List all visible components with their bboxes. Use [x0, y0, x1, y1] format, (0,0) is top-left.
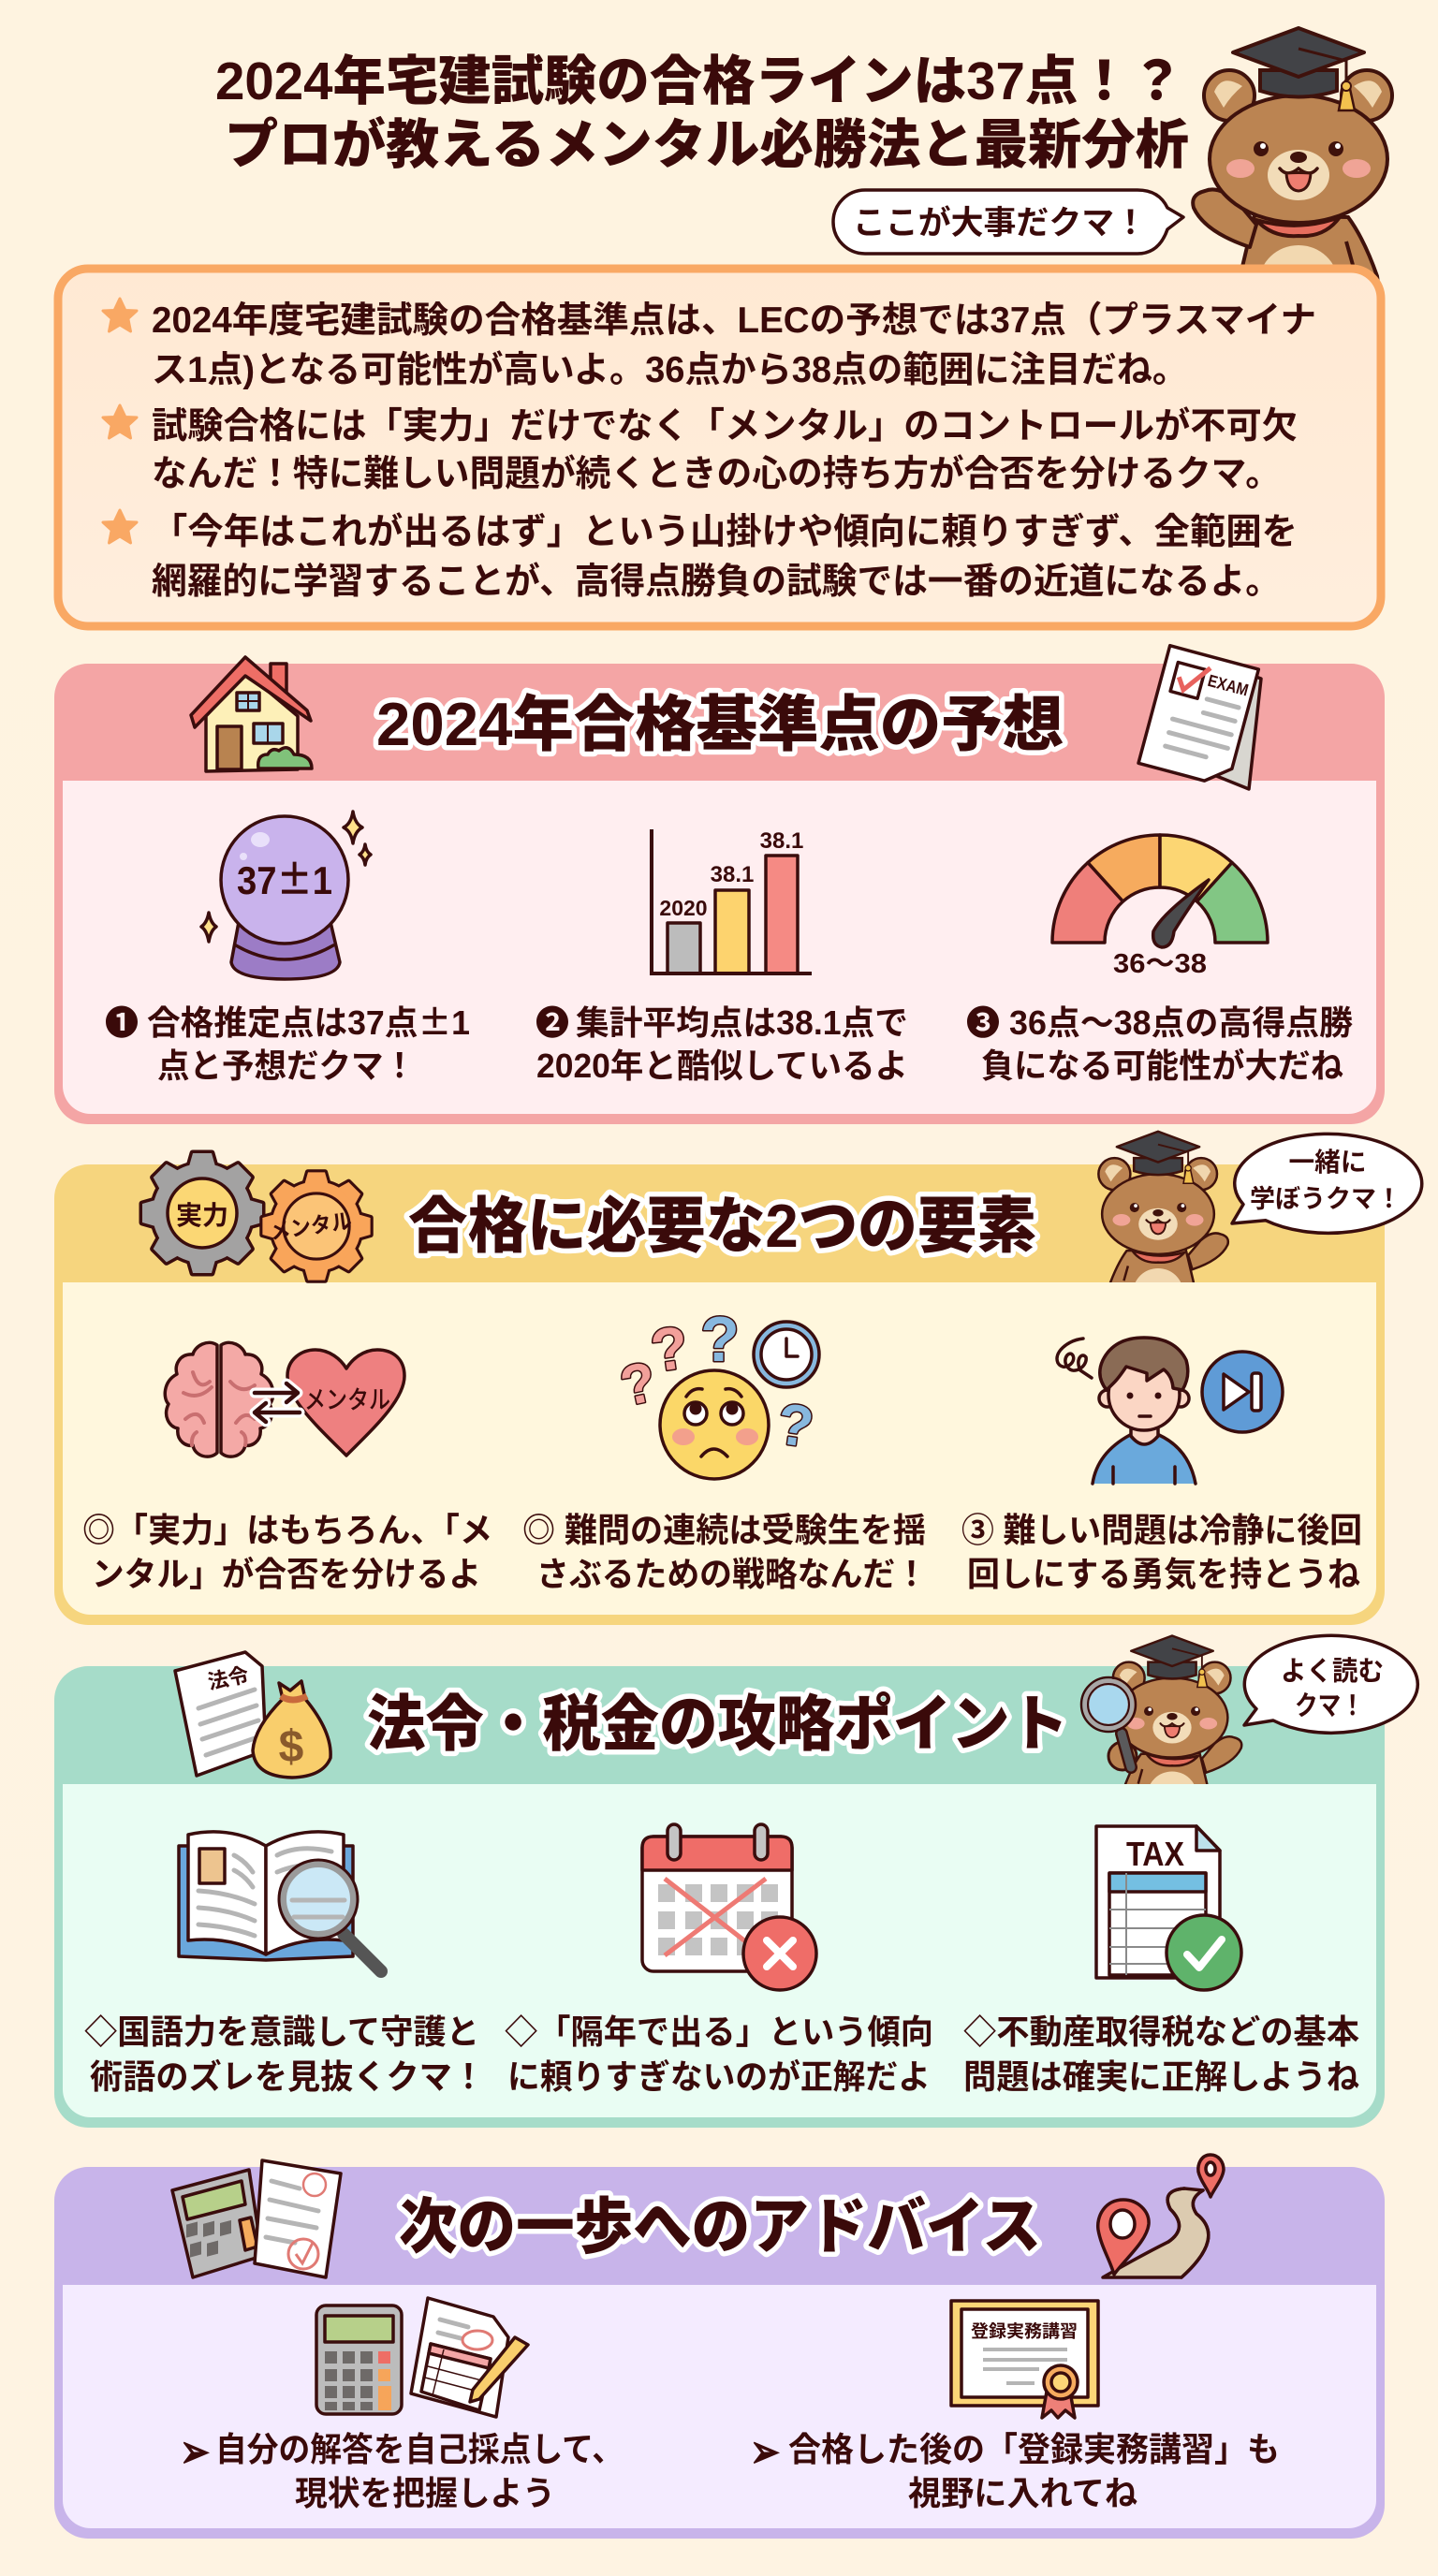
item 2 text: 2020年と酷似しているよ: [536, 1046, 908, 1085]
title: 2024年宅建試験の合格ラインは37点！？: [215, 51, 1183, 111]
icon: worried face with question marks and clock: ?: [773, 1392, 817, 1460]
item 3 text: ◇不動産取得税などの基本: [963, 2012, 1359, 2051]
icon: exam sheet: EXAM: [1206, 671, 1251, 700]
summary text 2: 試験合格には「実力」だけでなく「メンタル」のコントロールが不可欠: [152, 406, 1298, 446]
icon: magnifier held by bear: [1081, 1677, 1137, 1770]
item 2 text: ◇「隔年で出る」という傾向: [505, 2012, 933, 2051]
icon: star 3: [103, 510, 137, 543]
summary text 1: [152, 300, 1316, 390]
item 1 text: 自分の解答を自己採点して、: [215, 2430, 624, 2468]
item 2 text: ❷: [536, 1003, 569, 1042]
panel: summary: [58, 269, 1381, 626]
item 2 text: [750, 2425, 1280, 2512]
icon: open book with magnifier: [179, 1832, 381, 1971]
item 3 text: [966, 1003, 1353, 1085]
icon: brain and heart: メンタル: [304, 1386, 390, 1414]
icon: brain and heart: [165, 1342, 404, 1456]
icon: gears: [142, 1153, 371, 1281]
icon: calculator and answer sheet: [172, 2160, 341, 2277]
item 3 text: 問題は確実に正解しようね: [963, 2057, 1359, 2096]
icon: exam sheet: [1138, 646, 1261, 789]
title: プロが教えるメンタル必勝法と最新分析: [225, 115, 1189, 175]
icon: worried face with question marks and clock: ?: [647, 1313, 693, 1384]
item 3 text: [963, 2012, 1359, 2096]
panel: law and tax strategy: [54, 1635, 1417, 2128]
icon: map pins and road: [1098, 2155, 1224, 2277]
speech bubble: 一緒に学ぼうクマ！: 学ぼうクマ！: [1250, 1185, 1401, 1213]
bar chart: 38.1: [711, 862, 754, 887]
item 2 text: ◎ 難問の連続は受験生を揺: [522, 1511, 926, 1549]
heading: 次の一歩へのアドバイス: [399, 2192, 1041, 2261]
speech bubble: よく読むクマ！: [1244, 1635, 1417, 1733]
summary text 1: ス1点)となる可能性が高いよ。36点から38点の範囲に注目だね。: [152, 350, 1188, 390]
item 1 text: 現状を把握しよう: [295, 2474, 555, 2512]
panel: two elements for passing: [54, 1132, 1422, 1625]
summary text 3: [152, 512, 1298, 602]
icon: certificate with seal: [951, 2301, 1098, 2418]
icon: person skipping a question: [1057, 1338, 1283, 1484]
item 1 text: 術語のズレを見抜くクマ！: [90, 2057, 485, 2096]
summary text 2: なんだ！特に難しい問題が続くときの心の持ち方が合否を分けるクマ。: [152, 454, 1281, 494]
icon: star 1: [103, 299, 137, 331]
summary text 3: 網羅的に学習することが、高得点勝負の試験では一番の近道になるよ。: [152, 562, 1281, 602]
item 2 text: 視野に入れてね: [908, 2474, 1137, 2512]
item 3 text: ❸: [966, 1003, 1000, 1042]
mascot: bear with magnifier: [1113, 1636, 1241, 1818]
item 3 text: [961, 1511, 1362, 1593]
icon: worried face with question marks and clock: [615, 1304, 819, 1479]
icon: law document and money bag: $: [279, 1722, 304, 1772]
speech bubble: 一緒に学ぼうクマ！: 一緒に: [1288, 1148, 1367, 1177]
item 1 text: ➢: [180, 2425, 210, 2478]
item 1 text: [180, 2425, 624, 2512]
speech bubble: ここが大事だクマ！: ここが大事だクマ！: [853, 205, 1147, 242]
summary text 3: 「今年はこれが出るはず」という山掛けや傾向に頼りすぎず、全範囲を: [152, 512, 1298, 552]
speech bubble: 一緒に学ぼうクマ！: [1232, 1134, 1422, 1233]
heading: 法令・税金の攻略ポイント: [367, 1690, 1068, 1758]
item 1 text: 合格推定点は37点±1: [147, 996, 470, 1045]
item 3 text: 回しにする勇気を持とうね: [967, 1555, 1360, 1593]
panel: 2024 pass line forecast: [54, 646, 1385, 1124]
item 2 text: [505, 2012, 933, 2096]
item 1 text: 点と予想だクマ！: [157, 1046, 416, 1085]
gauge: [1052, 835, 1268, 979]
item 3 text: ③ 難しい問題は冷静に後回: [961, 1511, 1362, 1549]
icon: crystal ball: 37±1: [237, 849, 332, 906]
item 2 text: さぶるための戦略なんだ！: [536, 1555, 928, 1593]
icon: law document and money bag: 法令: [206, 1662, 251, 1694]
item 2 text: [536, 1003, 908, 1085]
item 1 text: [84, 2012, 485, 2096]
title: [215, 51, 1189, 175]
item 1 text: ❶: [105, 1003, 139, 1042]
icon: gears: 実力: [176, 1201, 228, 1230]
mascot: bear with graduation cap: [1193, 28, 1392, 320]
item 3 text: 36点～38点の高得点勝: [1009, 1003, 1353, 1042]
summary text 2: [152, 406, 1298, 494]
speech bubble: ここが大事だクマ！: [833, 190, 1183, 254]
item 2 text: 集計平均点は38.1点で: [576, 1003, 908, 1042]
speech bubble: よく読むクマ！: クマ！: [1295, 1691, 1364, 1721]
icon: certificate with seal: 登録実務講習: [971, 2321, 1078, 2341]
summary text 1: 2024年度宅建試験の合格基準点は、LECの予想では37点（プラスマイナ: [152, 300, 1316, 341]
item 2 text: ➢: [750, 2425, 780, 2478]
bar chart: 38.1: [760, 828, 803, 854]
heading: 2024年合格基準点の予想: [376, 690, 1064, 758]
item 2 text: に頼りすぎないのが正解だよ: [507, 2057, 931, 2096]
icon: gears: メンタル: [269, 1208, 353, 1244]
item 1 text: ンタル」が合否を分けるよ: [92, 1555, 481, 1593]
item 1 text: ◎「実力」はもちろん、「メ: [82, 1511, 492, 1549]
item 1 text: [82, 1511, 492, 1593]
icon: house: [191, 657, 312, 771]
icon: law document and money bag: [175, 1652, 330, 1778]
mascot: bear waving: [1098, 1132, 1228, 1315]
panel: next-step advice: [54, 2155, 1385, 2539]
heading: 合格に必要な2つの要素: [408, 1192, 1036, 1260]
icon: worried face with question marks and clock: ?: [700, 1304, 740, 1375]
icon: star 2: [103, 405, 137, 438]
bar chart: 2020: [659, 896, 708, 920]
item 1 text: [105, 996, 470, 1085]
bar chart: [652, 828, 812, 973]
icon: calendar with cross: [642, 1824, 816, 1990]
gauge: 36～38: [1113, 949, 1207, 979]
item 1 text: ◇国語力を意識して守護と: [84, 2012, 479, 2051]
icon: calculator and marked sheet: [316, 2298, 528, 2417]
item 2 text: [522, 1511, 928, 1593]
speech bubble: よく読むクマ！: よく読む: [1281, 1656, 1384, 1687]
item 2 text: 合格した後の「登録実務講習」も: [788, 2430, 1280, 2468]
icon: crystal ball: [201, 812, 371, 979]
icon: tax form with check: TAX: [1126, 1835, 1184, 1873]
icon: tax form with check: [1096, 1826, 1241, 1990]
item 3 text: 負になる可能性が大だね: [981, 1046, 1343, 1085]
icon: worried face with question marks and clock: ?: [615, 1350, 662, 1418]
